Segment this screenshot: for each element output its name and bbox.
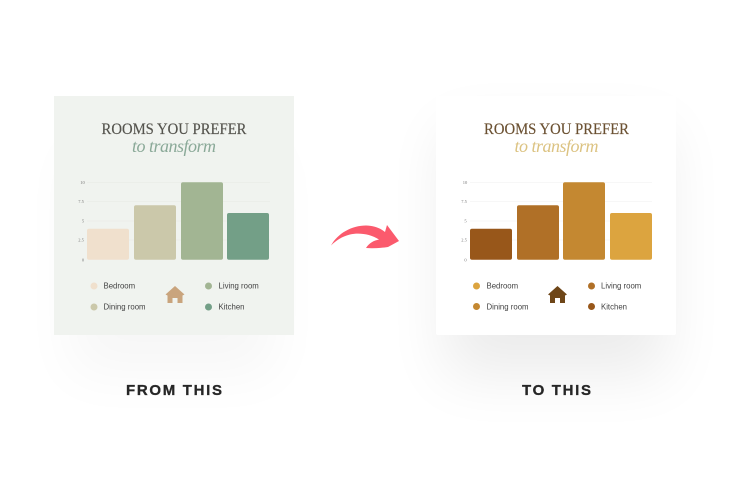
bar chart: 7.5	[461, 199, 468, 204]
caption: to this: TO THIS	[522, 382, 591, 399]
bar chart: 5	[464, 218, 467, 224]
legend: Bedroom	[104, 282, 135, 290]
title: rooms you prefer: ROOMS YOU PREFER	[102, 121, 247, 138]
bar chart: 7.5	[78, 199, 85, 204]
legend: Kitchen	[218, 302, 245, 312]
legend: Dining room	[104, 302, 146, 312]
panel: from this	[54, 96, 294, 335]
legend	[473, 282, 641, 312]
title: rooms you prefer: ROOMS YOU PREFER	[484, 121, 629, 138]
legend	[90, 282, 259, 312]
subtitle: to transform: to transform	[514, 136, 598, 156]
bar chart: 5	[82, 218, 85, 224]
bar chart: 10	[80, 180, 86, 185]
bar chart: 2.5	[461, 238, 468, 242]
bar chart	[78, 180, 270, 262]
subtitle: to transform: to transform	[132, 136, 216, 156]
arrow	[331, 225, 399, 248]
caption: from this: FROM THIS	[126, 382, 222, 399]
icon: house	[548, 286, 567, 303]
legend: Living room	[218, 282, 259, 290]
bar chart: 0	[464, 258, 467, 262]
legend: Dining room	[486, 302, 529, 312]
legend: Kitchen	[601, 302, 627, 312]
bar chart: 0	[82, 258, 85, 262]
bar chart	[461, 180, 652, 262]
legend: Bedroom	[486, 282, 518, 290]
bar chart: 10	[463, 180, 468, 185]
panel: to this	[436, 96, 676, 335]
legend: Living room	[601, 282, 641, 290]
icon: house	[166, 286, 184, 303]
bar chart: 2.5	[78, 238, 85, 242]
